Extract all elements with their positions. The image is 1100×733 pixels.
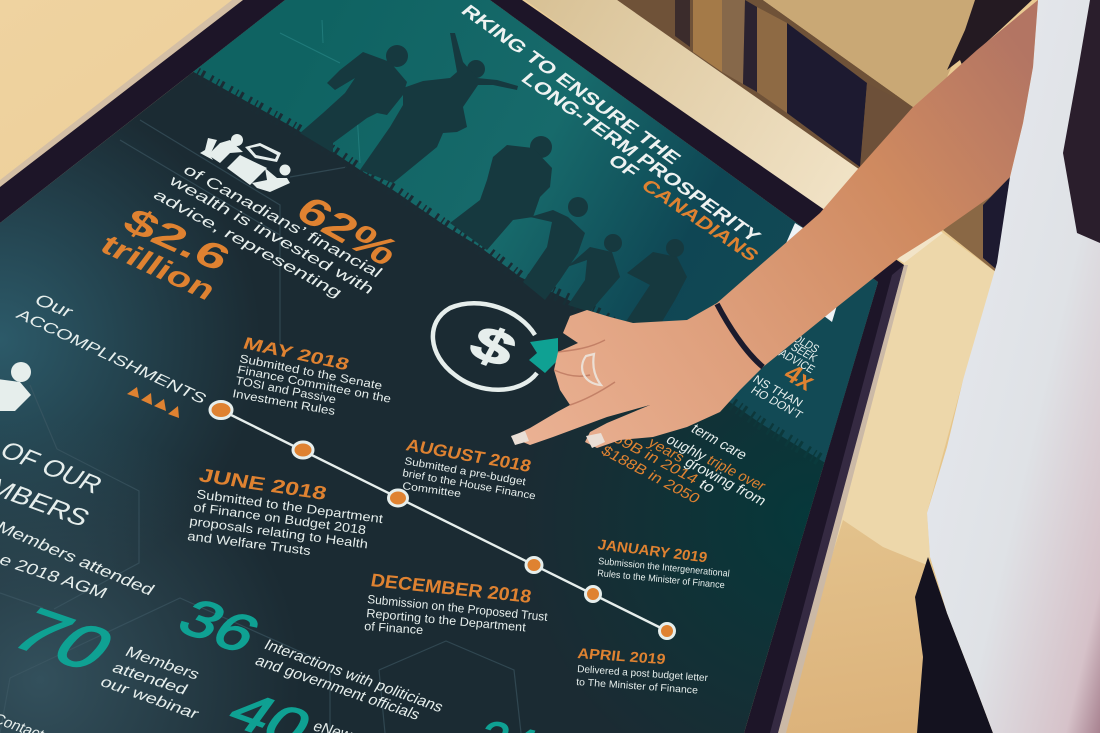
stat: 70 webinar members bbox=[18, 608, 199, 718]
fingernails bbox=[511, 431, 605, 448]
ring bbox=[582, 354, 601, 385]
screen bbox=[0, 0, 878, 733]
stat: 70 webinar members: our webinar bbox=[97, 674, 202, 722]
milestone: May 2018 bbox=[231, 334, 392, 418]
stat: households seek advice: 4x bbox=[778, 358, 821, 396]
stat: households seek advice bbox=[750, 336, 820, 418]
milestone: June 2018: proposals relating to Health bbox=[189, 514, 369, 551]
curtain background bbox=[617, 0, 1010, 273]
icon: circular dollar: $ bbox=[461, 315, 525, 378]
milestone: April 2019: Delivered a post budget letter bbox=[577, 664, 709, 684]
white marker at screen edge bbox=[783, 223, 838, 322]
milestone: May 2018: MAY 2018 bbox=[241, 334, 352, 374]
title: LONG-TERM PROSPERITY bbox=[517, 69, 766, 246]
stat: 62% of wealth: trillion bbox=[94, 229, 223, 306]
title: CANADIANS bbox=[637, 175, 764, 265]
milestone: August 2018: Submitted a pre-budget bbox=[403, 455, 527, 488]
milestone: June 2018: Submitted to the Department bbox=[196, 487, 384, 526]
stat: long-term care bbox=[602, 424, 766, 506]
stat: 62% of wealth: $2.6 bbox=[115, 200, 239, 278]
milestone: June 2018: and Welfare Trusts bbox=[187, 529, 311, 558]
milestone: January 2019 bbox=[598, 540, 730, 588]
milestone: April 2019: to The Minister of Finance bbox=[576, 677, 699, 697]
stat: 36 interactions bbox=[180, 601, 442, 720]
icon: people at a desk bbox=[200, 134, 290, 192]
heading: our accomplishments: Our bbox=[31, 290, 78, 321]
milestone: June 2018 bbox=[187, 465, 384, 558]
hexagon pattern bbox=[0, 120, 521, 733]
stat: long-term care: $188B in 2050 bbox=[598, 443, 703, 507]
silhouette: person 2 with raised arm bbox=[360, 33, 518, 183]
milestone: January 2019: Rules to the Minister of Finance bbox=[597, 568, 725, 591]
stat: 70 webinar members: attended bbox=[109, 660, 191, 698]
shirt bbox=[927, 0, 1100, 733]
bracelet bbox=[717, 304, 763, 367]
teal sky bbox=[190, 0, 878, 464]
stat: 62% of wealth: 62% bbox=[287, 188, 409, 274]
hand and forearm pointing bbox=[511, 0, 1038, 448]
milestone: December 2018: DECEMBER 2018 bbox=[369, 569, 533, 607]
cream table edge bbox=[525, 0, 943, 263]
stat: households seek advice: OLDS bbox=[790, 333, 821, 356]
stat: 36 interactions: Interactions with politicians bbox=[261, 637, 447, 716]
milestone: December 2018: Submission on the Proposed Trust bbox=[367, 592, 549, 624]
title: RKING TO ENSURE THE bbox=[457, 1, 686, 168]
right table surface bbox=[777, 233, 997, 733]
milestone: August 2018 bbox=[402, 440, 535, 500]
milestone: April 2019 bbox=[576, 648, 708, 694]
stat: 36 interactions: and government officials bbox=[252, 653, 423, 724]
stat: long-term care: years growing from bbox=[645, 435, 769, 509]
timeline bbox=[210, 402, 674, 638]
stat: long-term care: oughly triple over bbox=[663, 432, 769, 494]
milestone: August 2018: Committee bbox=[402, 480, 462, 500]
milestone: December 2018: Reporting to the Department bbox=[366, 606, 527, 635]
title: OF bbox=[604, 150, 644, 181]
milestone: December 2018: of Finance bbox=[364, 619, 424, 637]
cream wall top right bbox=[763, 0, 980, 107]
stat: long-term care: term care bbox=[687, 422, 750, 463]
heading: our accomplishments: ACCOMPLISHMENTS bbox=[12, 307, 210, 407]
milestone: May 2018: Investment Rules bbox=[231, 388, 336, 418]
stat: 40 newsletters bbox=[229, 698, 352, 733]
silhouette: person 6 bbox=[625, 239, 687, 325]
icon: circular dollar bbox=[433, 303, 558, 390]
sky light lines bbox=[280, 20, 360, 163]
left frame bevel bbox=[0, 0, 243, 187]
heading: our accomplishments bbox=[15, 296, 206, 402]
milestone: May 2018: Submitted to the Senate bbox=[238, 353, 383, 393]
stat: 36 interactions: 36 bbox=[167, 588, 272, 664]
stat: households seek advice: HO DON’T bbox=[748, 385, 804, 422]
grass edge bbox=[190, 70, 827, 464]
stat: 62% of wealth: wealth is invested with bbox=[164, 172, 378, 298]
hair bbox=[947, 0, 1100, 243]
milestone: August 2018: AUGUST 2018 bbox=[404, 436, 533, 476]
milestone: April 2019: APRIL 2019 bbox=[576, 646, 666, 668]
milestone: June 2018: JUNE 2018 bbox=[197, 465, 329, 505]
silhouette: person 5 bbox=[567, 234, 622, 312]
milestone: August 2018: brief to the House Finance bbox=[401, 467, 537, 502]
stat: 70 webinar members: Members bbox=[122, 644, 203, 683]
icon: person bbox=[0, 362, 31, 411]
arrows: four orange triangles bbox=[127, 387, 179, 418]
finger gaps shading bbox=[554, 340, 615, 405]
stat: households seek advice: ADVICE bbox=[776, 348, 817, 376]
stat: 62% of wealth bbox=[102, 168, 396, 300]
stat: households seek advice: SEEK bbox=[788, 342, 819, 365]
stat: 62% of wealth: advice, representing bbox=[149, 187, 346, 301]
trousers bbox=[915, 557, 993, 733]
milestone: January 2019: JANUARY 2019 bbox=[596, 537, 708, 566]
milestone: May 2018: TOSI and Passive bbox=[234, 375, 337, 406]
heading: of our members bbox=[0, 443, 101, 525]
stat: AGM attendance bbox=[0, 518, 158, 602]
silhouette: person 1 bbox=[300, 45, 408, 153]
silhouette: person 3 bbox=[450, 136, 552, 250]
screen background bbox=[0, 0, 878, 733]
milestone: June 2018: of Finance on Budget 2018 bbox=[193, 500, 367, 537]
milestone: January 2019: Submission the Intergenerational bbox=[598, 556, 730, 580]
silhouette: person 4 bbox=[523, 197, 588, 300]
stat: households seek advice: NS THAN bbox=[750, 374, 805, 410]
stat: 62% of wealth: of Canadians’ financial bbox=[179, 162, 386, 281]
title bbox=[457, 1, 766, 265]
stat: long-term care: $69B in 2014 to bbox=[601, 426, 718, 496]
milestone: May 2018: Finance Committee on the bbox=[236, 364, 392, 406]
milestone: December 2018 bbox=[364, 574, 548, 634]
